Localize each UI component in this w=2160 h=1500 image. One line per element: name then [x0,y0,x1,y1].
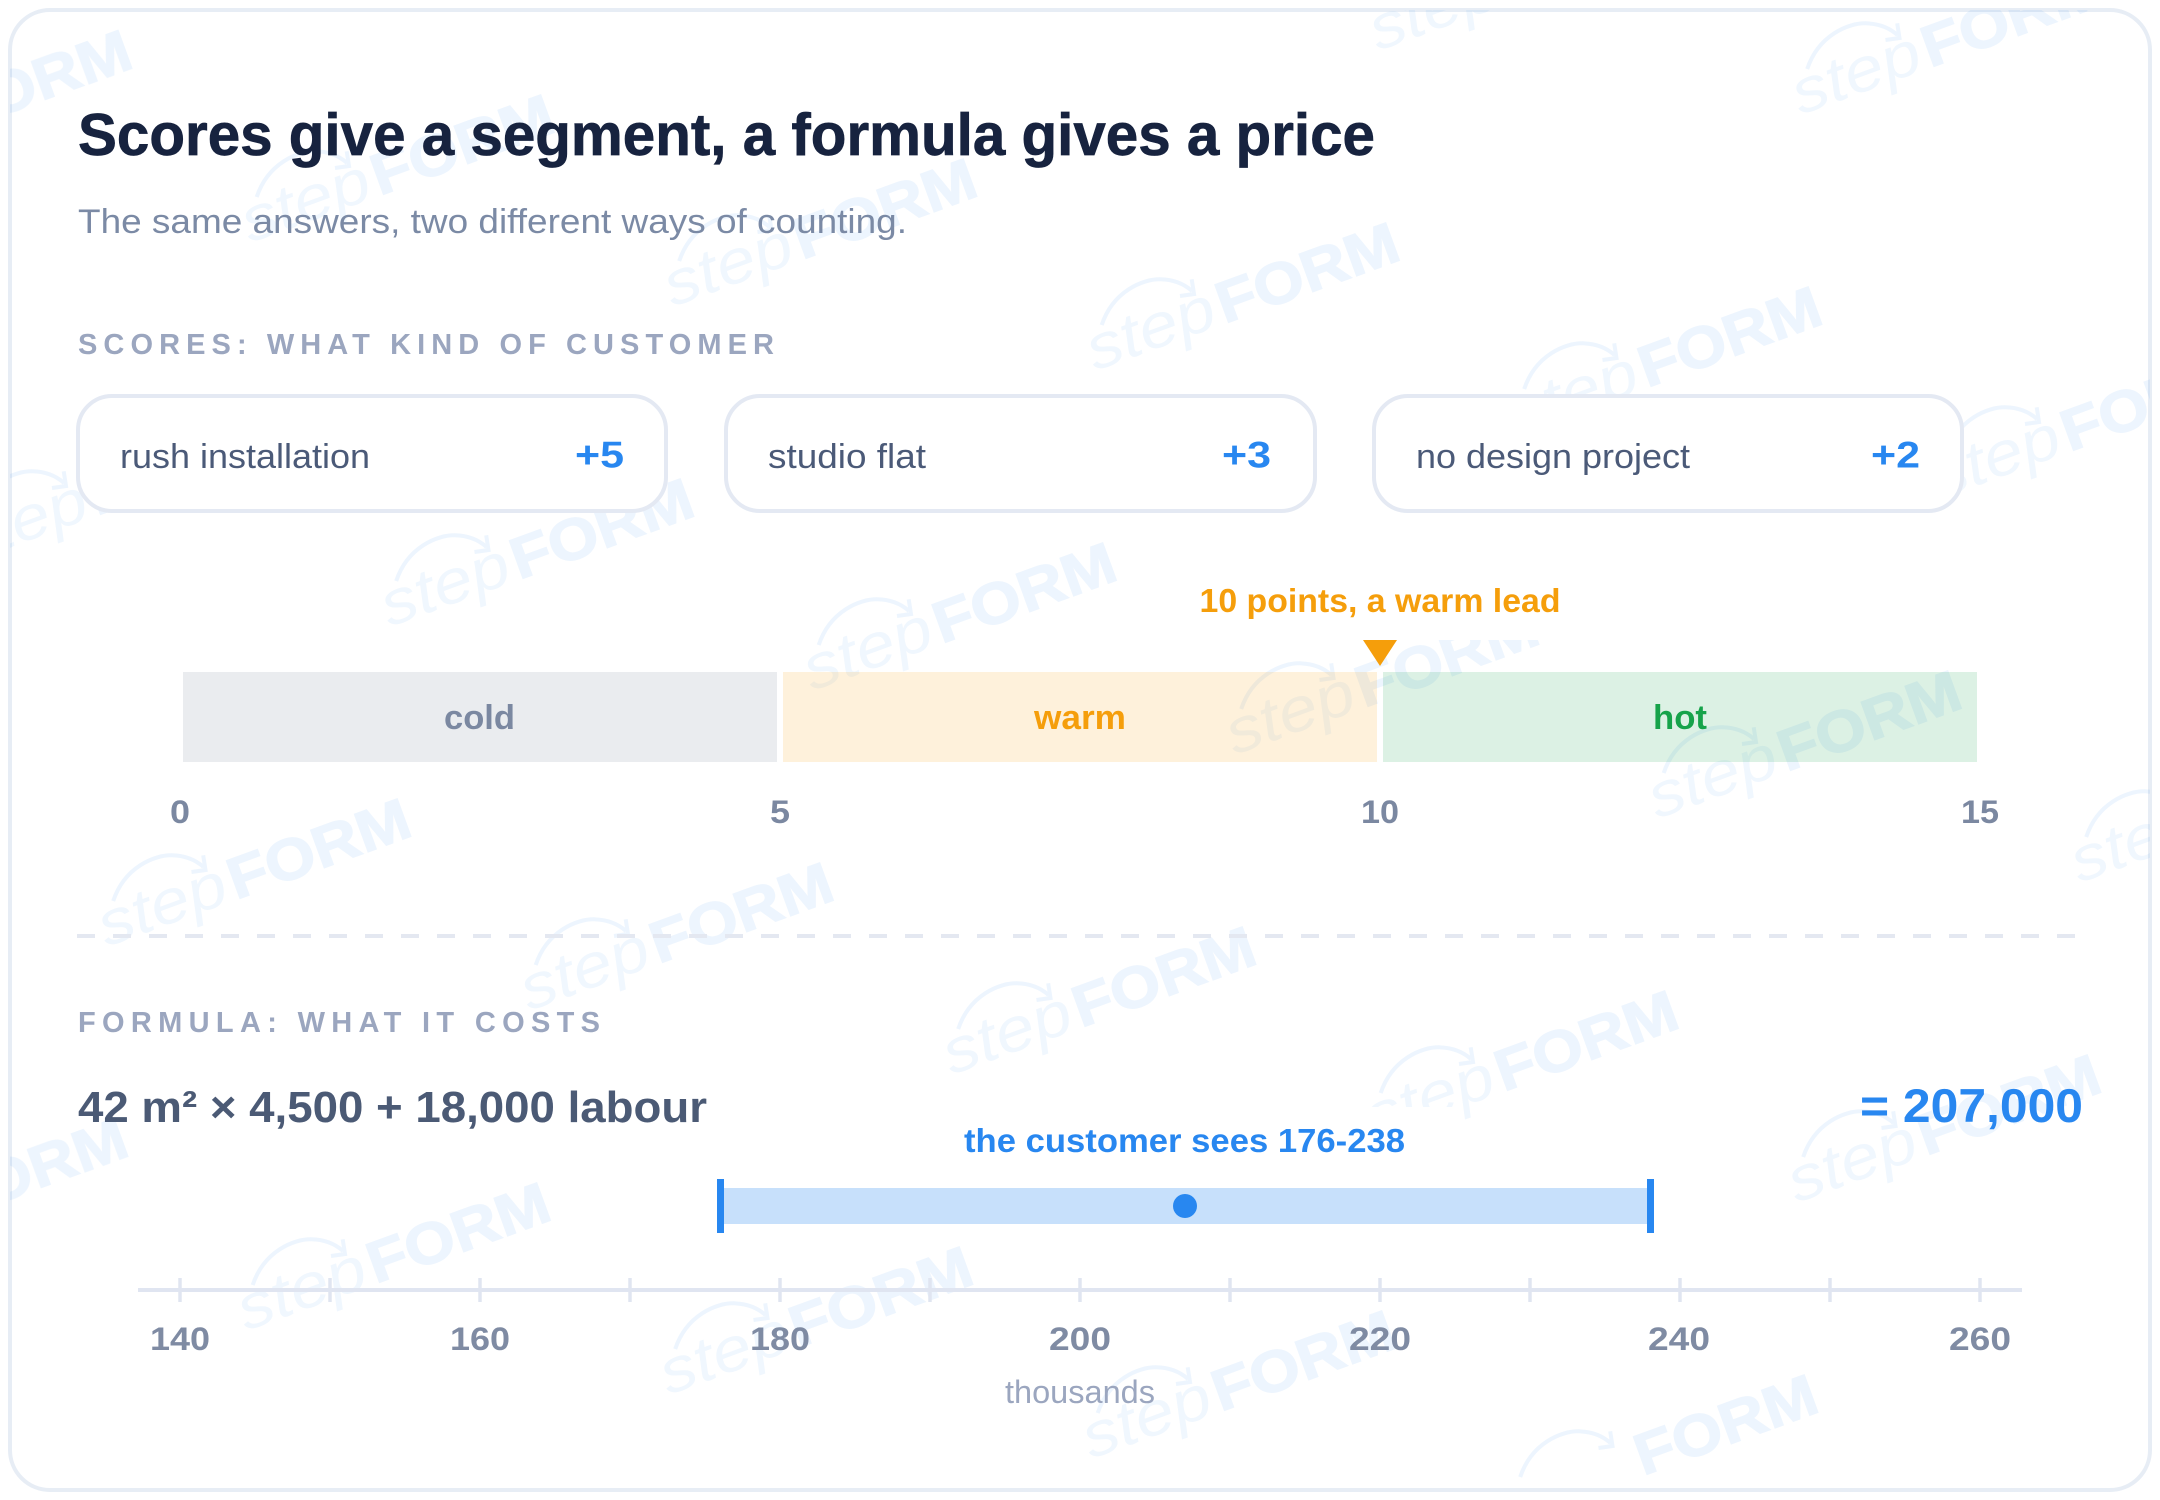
watermark pattern: step [231,146,380,256]
range chart [138,1107,2022,1410]
title: Scores give a segment, a formula gives a price [78,102,1375,168]
price axis: 200 [1049,1321,1111,1357]
watermark pattern: step [371,530,519,640]
watermark pattern: FORM [784,146,985,272]
watermark pattern: FORM [641,850,842,976]
segment: cold: cold [444,699,515,737]
score axis labels: 5 [770,794,790,830]
panel: score chips [78,396,1962,511]
point estimate dot [1173,1194,1197,1218]
range high cap [1647,1179,1654,1233]
segment: hot [1383,672,1977,762]
watermark pattern: step [1076,274,1225,384]
price axis: 180 [750,1321,810,1357]
segment: cold [183,672,777,762]
subtitle: The same answers, two different ways of counting. [78,203,907,241]
segment: hot: hot [1653,699,1707,737]
score axis labels [170,794,1999,830]
section heading: formula: FORMULA: WHAT IT COSTS [78,1007,600,1039]
chip: studio flat: +3 [1222,434,1271,476]
watermark pattern: FORM [1203,1298,1404,1424]
section heading: scores: SCORES: WHAT KIND OF CUSTOMER [78,329,774,361]
watermark pattern: step [1072,1362,1221,1472]
formula result: = 207,000 [1860,1079,2083,1132]
watermark pattern: step [88,850,236,960]
chip: no design project: +2 [1871,434,1920,476]
watermark pattern: step [510,914,659,1024]
segment scale chart [170,672,1999,830]
range label [910,1107,1460,1170]
axis unit label: thousands [1005,1374,1155,1410]
watermark pattern: FORM [358,1170,559,1296]
chip: studio flat: studio flat [768,438,926,476]
price axis: 220 [1349,1321,1411,1357]
segment: warm [783,672,1377,762]
score axis labels: 15 [1961,794,1999,830]
chip: no design project [1374,396,1962,511]
watermark pattern: FORM [1629,274,1830,400]
watermark pattern: step [1499,338,1647,448]
watermark pattern: step [1782,18,1930,128]
price axis: 160 [450,1321,510,1357]
watermark pattern: FORM [1769,658,1970,784]
watermark pattern: step [1778,1106,1926,1216]
watermark pattern: step [933,978,1081,1088]
watermark pattern: FORM [1346,594,1547,720]
watermark pattern: step [1355,1042,1504,1152]
price axis: 240 [1648,1321,1710,1357]
chip: rush installation: rush installation [120,438,370,476]
chip: studio flat [726,396,1315,511]
watermark pattern: step [1638,722,1787,832]
price axis: 140 [150,1321,210,1357]
price axis [138,1278,2022,1357]
watermark pattern: step [227,1234,376,1344]
segment: warm: warm [1033,699,1126,737]
score axis labels: 0 [170,794,190,830]
watermark pattern: FORM [1486,978,1687,1104]
watermark pattern: FORM [924,530,1125,656]
callout: 10 points marker [1190,576,1570,666]
watermark pattern: FORM [501,466,702,592]
watermark pattern: FORM [1908,1042,2109,1168]
watermark pattern: FORM [1063,914,1264,1040]
watermark pattern: FORM [79,402,280,528]
price axis: 260 [1949,1321,2011,1357]
range band [720,1188,1650,1224]
formula expression: 42 m² × 4,500 + 18,000 labour [78,1083,707,1132]
watermark pattern: step [1921,402,2070,512]
watermark pattern: FORM [1625,1362,1826,1488]
watermark pattern: step [650,1298,798,1408]
watermark pattern: step [793,594,942,704]
watermark pattern: step [654,210,802,320]
callout: 10 points marker: 10 points, a warm lead [1200,582,1560,619]
score axis labels: 10 [1361,794,1399,830]
range label: the customer sees 176-238 [964,1122,1405,1159]
watermark pattern: FORM [218,786,419,912]
watermark pattern: FORM [362,82,563,208]
chip: rush installation [78,396,666,511]
watermark pattern: FORM [780,1234,981,1360]
watermark pattern: FORM [1207,210,1408,336]
chip: rush installation: +5 [575,434,624,476]
watermark pattern: step [1216,658,1364,768]
range low cap [717,1179,724,1233]
chip: no design project: no design project [1416,438,1690,476]
